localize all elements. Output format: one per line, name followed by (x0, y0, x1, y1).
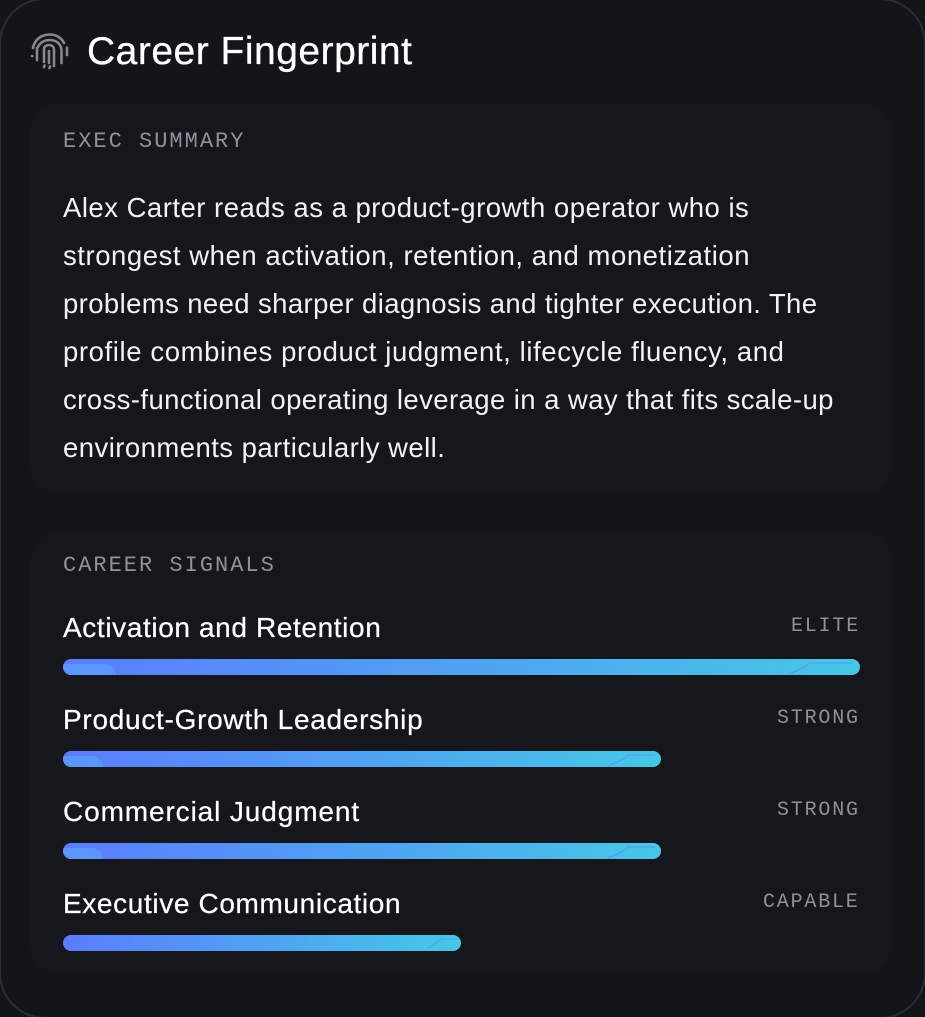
signal: activation and retention: Activation and Retention (63, 612, 381, 643)
panel: exec summary (30, 103, 892, 494)
heading: exec summary: EXEC SUMMARY (63, 129, 245, 154)
signal: executive communication (63, 888, 860, 951)
text block: summary: cross-functional operating leverage in a way that fits scale-up (63, 384, 834, 415)
signal: executive communication: CAPABLE (763, 891, 860, 914)
signal: activation and retention: ELITE (791, 615, 860, 638)
text block: summary (63, 192, 834, 463)
text block: summary: environments particularly well. (63, 432, 445, 463)
signal: commercial judgment: Commercial Judgment (63, 796, 360, 827)
icon: fingerprint (30, 33, 68, 70)
text block: summary: profile combines product judgment, lifecycle fluency, and (63, 336, 785, 367)
signal: commercial judgment (63, 796, 860, 859)
panel: career signals (30, 532, 892, 974)
signal: product-growth leadership: STRONG (777, 707, 860, 730)
signal: product-growth leadership: Product-Growth Leadership (63, 704, 423, 735)
text block: summary: strongest when activation, retention, and monetization (63, 240, 750, 271)
signal: executive communication: Executive Communication (63, 888, 401, 919)
text block: summary: Alex Carter reads as a product-growth operator who is (63, 192, 749, 223)
title: Career Fingerprint (87, 30, 412, 73)
text block: summary: problems need sharper diagnosis and tighter execution. The (63, 288, 817, 319)
signal: product-growth leadership (63, 704, 860, 767)
heading: career signals: CAREER SIGNALS (63, 553, 276, 578)
signal: commercial judgment: STRONG (777, 799, 860, 822)
signal: activation and retention (62, 612, 860, 675)
